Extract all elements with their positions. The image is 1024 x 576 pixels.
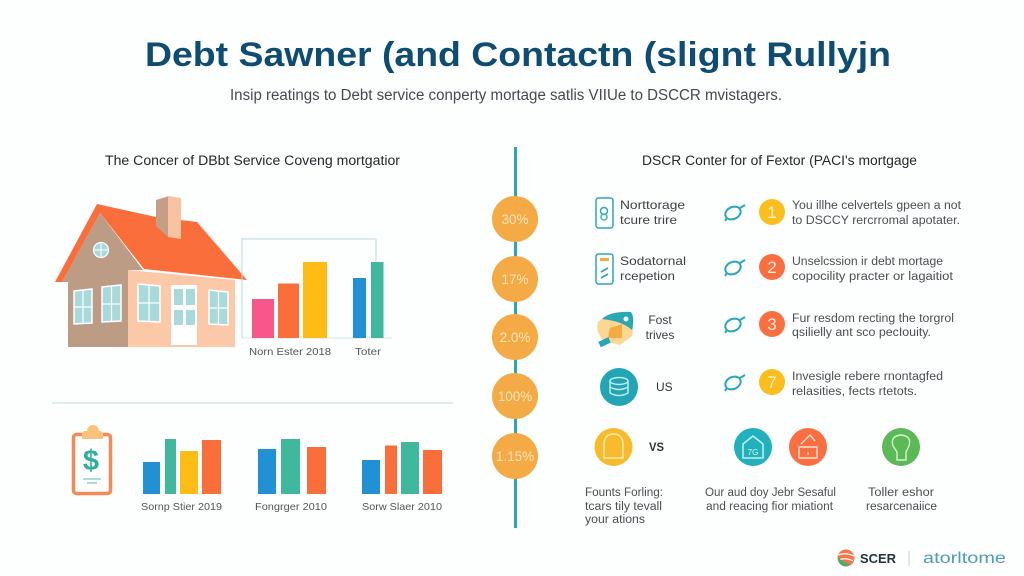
label: VS: VS [649,440,664,454]
item 3 [723,311,954,339]
left heading: The Concer of DBbt Service Coveng mortgatior [105,153,401,168]
factor label: Norttorage: Norttorage [620,198,685,212]
caption: right: resarcenaiice [866,501,937,513]
item 4: 7 [767,373,777,392]
icon: clipboard with dollar sign [74,425,110,494]
right heading: DSCR Conter for of Fextor (PACI's mortgage [642,153,917,168]
timeline of percentages: 17% [501,272,529,287]
item 1: You illhe celvertels gpeen a not [792,200,962,212]
caption: left: your ations [585,514,645,526]
timeline of percentages: 30% [501,212,529,227]
icon: database [600,368,638,406]
item 2: copocility practer or lagaitiot [792,271,954,283]
factor label: Sodatornal: Sodatornal [620,254,686,268]
panel: lower charts [74,425,442,513]
bar chart: mortgage: Norn Ester 2018 [249,346,331,358]
icon: teal house: 7G [748,448,758,457]
timeline of percentages: 100% [498,389,532,404]
timeline of percentages: 2.0% [500,330,530,345]
factor label: Fost: Fost [648,313,672,327]
timeline of percentages: 1.15% [496,449,534,464]
subtitle: Insip reatings to Debt service conperty mortage satlis VIIUe to DSCCR mvistagers. [230,87,782,104]
icon: phone one [596,198,613,228]
bar chart: group two [255,439,327,513]
caption: right: Toller eshor [868,487,934,499]
panel: house and mortgage chart [55,153,401,358]
icon: green head [882,428,920,466]
item 1 [723,199,962,227]
label: US: US [656,380,673,394]
panel: factor column [596,198,686,406]
icon: house [55,196,247,347]
item 2: Unselcssion ir debt mortage [792,256,943,268]
logo [838,550,1006,567]
bar chart: group three: Sorw Slaer 2010 [362,501,442,513]
icon: yellow arch [594,428,632,466]
item 4: relasities, fects rtetots. [792,386,917,398]
item 4 [723,369,943,398]
icon: phone two [596,254,613,284]
item 3: qsilielly ant sco pecIouity. [792,327,931,339]
bar chart: group one [141,439,222,513]
logo: atorltome [923,550,1006,567]
bar chart: mortgage [242,239,392,358]
icon: logo mark [838,550,854,566]
caption: left: tcars tily tevall [585,501,662,513]
item 1: 1 [767,203,777,222]
caption: middle: Our aud doy Jebr Sesaful [705,487,836,499]
icon: orange box [789,428,827,466]
bar chart: group three [362,442,442,513]
factor label: Sodatornal: rcepetion [620,269,675,283]
item 2: 2 [767,258,777,277]
item 4: Invesigle rebere rnontagfed [792,371,943,383]
panel: numbered list [723,199,962,398]
factor label: Norttorage: tcure trire [620,213,677,227]
bar chart: group two: Fongrger 2010 [255,501,327,513]
item 3: 3 [767,315,777,334]
bar chart: group one: Sornp Stier 2019 [141,501,222,513]
icon: map [597,312,633,347]
title: Debt Sawner (and Contactn (slignt Rullyjn [145,36,891,74]
bar chart: mortgage: Toter [355,346,382,358]
item 1: to DSCCY rercrromal apotater. [792,215,960,227]
icon: teal house [734,428,772,466]
item 3: Fur resdom recting the torgrol [792,313,954,325]
factor label: Fost: trives [646,328,674,342]
logo: SCER [860,551,897,566]
item 2 [723,254,954,283]
caption: middle: and reacing fior miationt [706,501,834,513]
icon: clipboard with dollar sign: $ [83,445,99,477]
panel: bottom icon row [585,428,937,526]
caption: left: Founts Forling: [585,487,663,499]
timeline of percentages [492,147,538,528]
